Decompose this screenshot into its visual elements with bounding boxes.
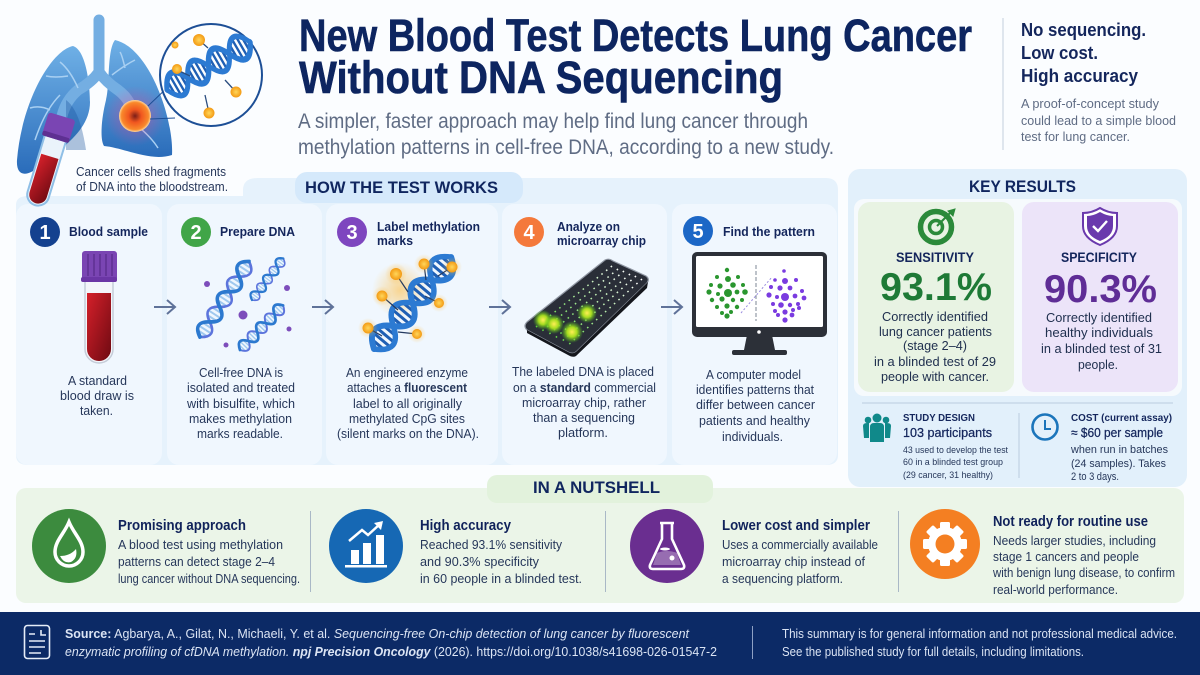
subtitle <box>298 110 834 159</box>
icon: blood tube <box>81 251 117 363</box>
step 2: prepare DNA: makes methylation <box>189 412 292 426</box>
step 4: analyze on microarray chip: microarray chip <box>557 233 646 248</box>
item: promising approach <box>32 509 300 586</box>
step 3: label methylation marks: An engineered enzyme <box>346 366 468 380</box>
card: sensitivity: Correctly identified <box>882 309 988 324</box>
step 3: label methylation marks: methylated CpG sites <box>349 412 465 426</box>
card: specificity: 90.3% <box>1044 268 1157 311</box>
icon: trachea and bronchi <box>62 20 130 116</box>
icon: DNA fragments <box>194 255 292 354</box>
item: lower cost and simpler <box>630 509 878 586</box>
icon: tumour <box>105 86 165 146</box>
step 1: blood sample: A standard <box>68 374 127 388</box>
step 3: label methylation marks: marks <box>377 233 413 248</box>
item: not ready for routine use: Not ready for routine use <box>993 514 1148 530</box>
subtitle: A simpler, faster approach may help find lung cancer through <box>298 110 808 133</box>
icon: right lung <box>102 40 172 157</box>
card: specificity: in a blinded test of 31 <box>1041 341 1162 356</box>
item: not ready for routine use: Needs larger studies, including <box>993 534 1156 548</box>
step 1: blood sample: taken. <box>80 404 113 418</box>
heading pill: how the test works: HOW THE TEST WORKS <box>305 178 498 197</box>
step 2: prepare DNA: 2 <box>190 222 202 244</box>
step 4: analyze on microarray chip: platform. <box>558 426 608 440</box>
icon: tilted blood tube overlapping the panel <box>22 112 76 209</box>
proof-of-concept note: could lead to a simple blood <box>1021 114 1176 128</box>
item: not ready for routine use <box>910 509 1175 597</box>
icon: document <box>24 626 50 658</box>
item: promising approach: patterns can detect stage 2–4 <box>118 555 275 569</box>
card: sensitivity: lung cancer patients <box>879 324 992 339</box>
proof-of-concept note <box>1021 97 1176 144</box>
step 4: analyze on microarray chip: than a sequencing <box>533 411 635 425</box>
tagline: No sequencing. <box>1021 19 1146 40</box>
block: cost: COST (current assay) <box>1071 412 1172 424</box>
step 5: find the pattern: 5 <box>692 221 704 243</box>
block: study design <box>863 412 1008 481</box>
card: specificity: SPECIFICITY <box>1061 250 1137 265</box>
step 3: label methylation marks: Label methylation <box>377 219 480 234</box>
arrow: step 2 to 3 <box>312 300 333 314</box>
icon: labelled DNA helix <box>358 249 462 357</box>
card: specificity <box>1022 202 1178 392</box>
tagline: High accuracy <box>1021 65 1139 86</box>
step 4: analyze on microarray chip <box>502 204 667 465</box>
block: cost: 2 to 3 days. <box>1071 471 1119 483</box>
icon: clock <box>1032 414 1058 440</box>
step 5: find the pattern <box>672 204 837 465</box>
icon: monitor with clusters <box>692 252 827 355</box>
block: cost: (24 samples). Takes <box>1071 458 1166 470</box>
panel: in a nutshell <box>16 475 1184 603</box>
caption: cancer cells shed DNA: of DNA into the bloodstream. <box>76 180 228 194</box>
icon: rising bar chart <box>329 509 403 583</box>
step 5: find the pattern: individuals. <box>722 430 783 444</box>
title: Without DNA Sequencing <box>299 52 783 103</box>
card: sensitivity: SENSITIVITY <box>896 250 974 265</box>
step 4: analyze on microarray chip: 4 <box>523 222 535 244</box>
panel: key results <box>848 169 1187 487</box>
block: study design: 43 used to develop the test <box>903 445 1008 456</box>
source citation <box>65 626 717 659</box>
icon: gear <box>910 509 980 579</box>
card: specificity: healthy individuals <box>1045 325 1154 340</box>
item: promising approach: A blood test using methylation <box>118 538 283 552</box>
item: lower cost and simpler: microarray chip instead of <box>722 555 866 569</box>
disclaimer: See the published study for full details, including limitations. <box>782 644 1084 659</box>
card: sensitivity: people with cancer. <box>881 369 989 384</box>
footer bar <box>0 612 1200 675</box>
heading pill: how the test works <box>295 172 523 203</box>
caption: cancer cells shed DNA: Cancer cells shed fragments <box>76 165 226 179</box>
step 4: analyze on microarray chip: on a standard commercial <box>513 381 656 395</box>
step 3: label methylation marks: label to all originally <box>353 397 463 411</box>
subtitle: methylation patterns in cell-free DNA, according to a new study. <box>298 136 834 159</box>
proof-of-concept note: test for lung cancer. <box>1021 130 1130 144</box>
item: lower cost and simpler: Uses a commercially available <box>722 538 878 552</box>
proof-of-concept note: A proof-of-concept study <box>1021 97 1160 111</box>
card: sensitivity: (stage 2–4) <box>903 338 967 353</box>
item: not ready for routine use: real-world performance. <box>993 583 1118 597</box>
panel: how the test works <box>16 172 838 465</box>
step 2: prepare DNA: marks readable. <box>197 427 283 441</box>
icon: microarray chip <box>525 259 648 357</box>
block: cost <box>1032 412 1172 483</box>
step 1: blood sample: blood draw is <box>60 389 134 403</box>
caption: cancer cells shed DNA <box>76 165 228 194</box>
item: lower cost and simpler: a sequencing platform. <box>722 572 843 586</box>
heading: key results: KEY RESULTS <box>969 177 1076 196</box>
step 5: find the pattern: differ between cancer <box>696 398 815 412</box>
step 2: prepare DNA <box>167 204 322 465</box>
arrow: step 3 to 4 <box>489 300 510 314</box>
step 2: prepare DNA: isolated and treated <box>187 381 295 395</box>
block: study design: 103 participants <box>903 425 992 440</box>
step 5: find the pattern: A computer model <box>706 368 801 382</box>
item: high accuracy: Reached 93.1% sensitivity <box>420 538 563 552</box>
arrow: step 1 to 2 <box>154 300 175 314</box>
source citation: Source: Agbarya, A., Gilat, N., Michaeli, Y. et al. Sequencing-free On-chip detection of lung cancer by fluorescent <box>65 626 690 641</box>
step 4: analyze on microarray chip: The labeled DNA is placed <box>512 365 654 379</box>
item: not ready for routine use: stage 1 cancers and people <box>993 550 1139 564</box>
step 3: label methylation marks: (silent marks on the DNA). <box>337 427 479 441</box>
step 3: label methylation marks: attaches a fluorescent <box>347 381 468 395</box>
step 1: blood sample: Blood sample <box>69 224 148 239</box>
card: sensitivity: 93.1% <box>880 266 992 309</box>
item: high accuracy <box>329 509 582 586</box>
step 2: prepare DNA: with bisulfite, which <box>186 397 295 411</box>
step 5: find the pattern: patients and healthy <box>699 414 811 428</box>
step 3: label methylation marks <box>326 204 498 465</box>
icon: flask <box>630 509 704 583</box>
disclaimer <box>782 626 1177 659</box>
step 5: find the pattern: Find the pattern <box>723 224 815 239</box>
block: cost: ≈ $60 per sample <box>1071 425 1163 440</box>
item: not ready for routine use: with benign lung disease, to confirm <box>992 566 1175 580</box>
icon: target <box>920 209 955 242</box>
step 1: blood sample <box>16 204 162 465</box>
item: promising approach: Promising approach <box>118 518 246 534</box>
step 2: prepare DNA: Cell-free DNA is <box>199 366 283 380</box>
icon: shield <box>1083 208 1117 245</box>
item: promising approach: lung cancer without DNA sequencing. <box>118 572 300 586</box>
item: high accuracy: in 60 people in a blinded test. <box>420 572 582 586</box>
tagline <box>1021 19 1146 86</box>
block: study design: (29 cancer, 31 healthy) <box>903 470 993 481</box>
card: specificity: people. <box>1078 357 1118 372</box>
step 1: blood sample: 1 <box>39 222 51 244</box>
block: study design: 60 in a blinded test group <box>903 457 1003 468</box>
tagline: Low cost. <box>1021 42 1098 63</box>
block: cost: when run in batches <box>1070 444 1168 456</box>
item: lower cost and simpler: Lower cost and simpler <box>722 518 870 534</box>
title: New Blood Test Detects Lung Cancer <box>299 10 972 61</box>
item: high accuracy: High accuracy <box>420 518 511 534</box>
step 2: prepare DNA: Prepare DNA <box>220 224 296 239</box>
icon: DNA magnifier <box>160 24 262 126</box>
icon: people <box>863 414 891 442</box>
card: specificity: Correctly identified <box>1046 310 1152 325</box>
heading tab: in a nutshell <box>487 475 713 503</box>
illustration: lungs, tumour and DNA magnifier <box>17 20 262 174</box>
item: high accuracy: and 90.3% specificity <box>420 555 540 569</box>
icon: left lung <box>17 46 90 174</box>
source citation: enzymatic profiling of cfDNA methylation. npj Precision Oncology (2026). https://doi.org/10.1038/s41698-026-01547-2 <box>65 644 717 659</box>
step 3: label methylation marks: 3 <box>346 222 358 244</box>
step 4: analyze on microarray chip: Analyze on <box>557 219 620 234</box>
icon: blood drop <box>32 509 106 583</box>
card: sensitivity <box>858 202 1014 392</box>
step 4: analyze on microarray chip: microarray chip, rather <box>522 396 646 410</box>
heading tab: in a nutshell: IN A NUTSHELL <box>533 478 660 497</box>
block: study design: STUDY DESIGN <box>903 412 975 424</box>
step 5: find the pattern: identifies patterns that <box>696 383 815 397</box>
card: sensitivity: in a blinded test of 29 <box>874 354 996 369</box>
arrow: step 4 to 5 <box>661 300 682 314</box>
title <box>299 10 972 103</box>
